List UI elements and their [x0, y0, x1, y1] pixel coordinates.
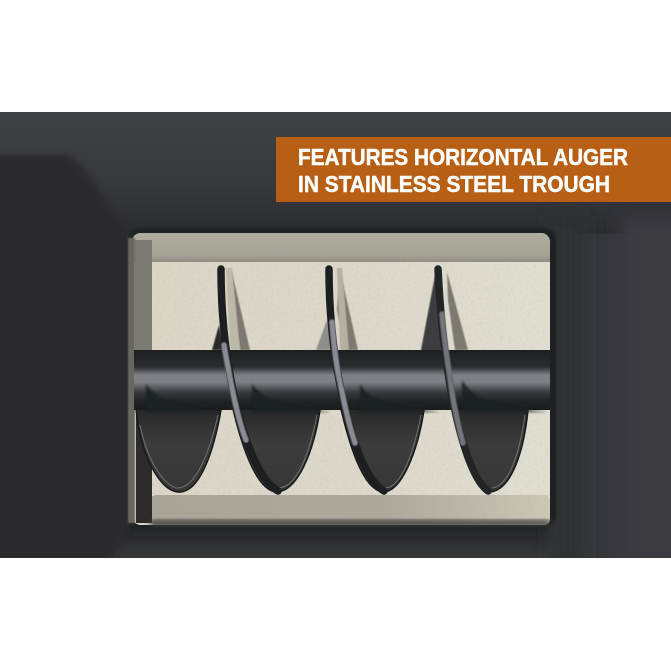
front edges of auger flights — [221, 269, 488, 491]
callout text line 1: FEATURES HORIZONTAL AUGER — [298, 144, 628, 170]
auger shaft — [134, 350, 550, 410]
lower flight lobes — [136, 405, 528, 492]
orange callout banner — [276, 137, 671, 202]
panel: stainless steel trough opening — [128, 228, 556, 528]
panel: dark auger housing — [0, 112, 671, 580]
infographic: auger photo illustration — [0, 112, 671, 558]
shadows cast by flights on the trough wall — [231, 268, 468, 350]
light rims on lobes — [140, 415, 525, 488]
helical shading on shaft — [146, 380, 548, 412]
back faces of auger flights above shaft — [212, 268, 445, 370]
callout text line 2: IN STAINLESS STEEL TROUGH — [298, 171, 610, 197]
